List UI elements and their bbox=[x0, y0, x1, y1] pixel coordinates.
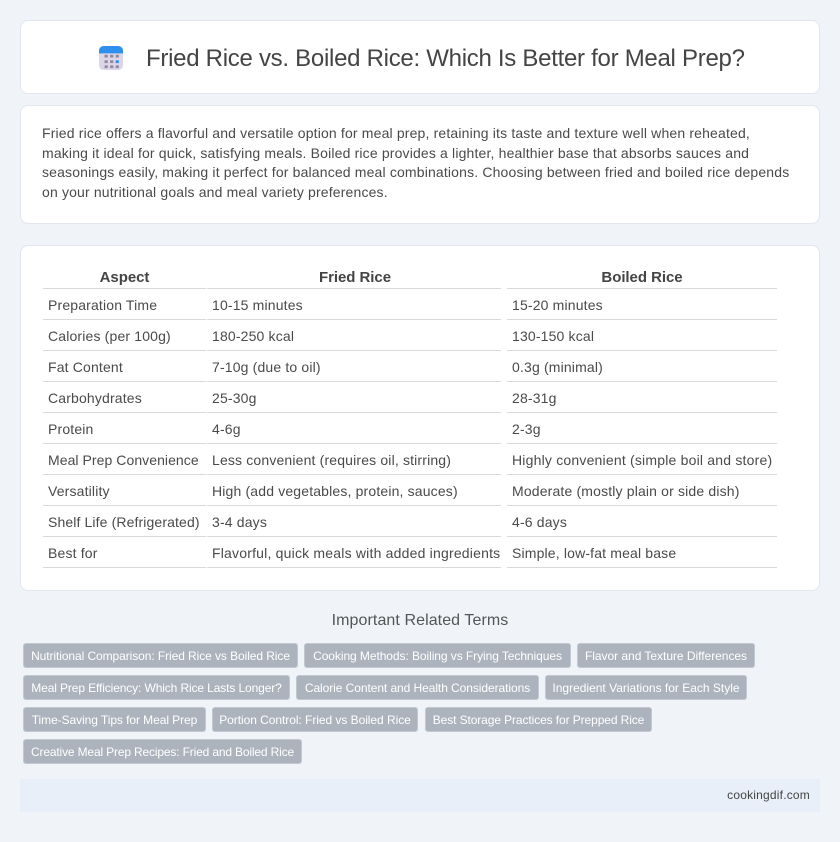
header card bbox=[20, 20, 820, 94]
related term tags: Calorie Content and Health Considerations bbox=[305, 681, 530, 695]
table rows: Highly convenient (simple boil and store) bbox=[512, 452, 772, 468]
table rows: Protein bbox=[48, 421, 93, 437]
table rows: Moderate (mostly plain or side dish) bbox=[512, 483, 740, 499]
intro text panel bbox=[20, 105, 820, 224]
table rows bbox=[43, 288, 777, 568]
table rows: 4-6g bbox=[212, 421, 241, 437]
table rows: Versatility bbox=[48, 483, 110, 499]
table rows: Calories (per 100g) bbox=[48, 328, 171, 344]
table rows: 4-6 days bbox=[512, 514, 567, 530]
related term tags: Cooking Methods: Boiling vs Frying Techniques bbox=[313, 649, 562, 663]
intro paragraph: seasonings easily, making it perfect for balanced meal combinations. Choosing between fried and boiled rice depends bbox=[42, 164, 789, 180]
table headers bbox=[100, 269, 683, 286]
table rows: 3-4 days bbox=[212, 514, 267, 530]
related term tags: Ingredient Variations for Each Style bbox=[552, 681, 740, 695]
related term tags: Best Storage Practices for Prepped Rice bbox=[433, 713, 644, 727]
related term tags bbox=[23, 643, 755, 764]
table rows: Best for bbox=[48, 545, 98, 561]
icon: calendar bbox=[99, 46, 123, 70]
table headers: Aspect bbox=[100, 269, 149, 286]
related term tags: Meal Prep Efficiency: Which Rice Lasts Longer? bbox=[31, 681, 282, 695]
table rows: 10-15 minutes bbox=[212, 297, 303, 313]
footer source text: cookingdif.com bbox=[727, 788, 810, 802]
intro paragraph: making it ideal for quick, satisfying meals. Boiled rice provides a lighter, healthier base that absorbs sauces and bbox=[42, 144, 749, 160]
related term tags: Flavor and Texture Differences bbox=[585, 649, 747, 663]
table rows: 0.3g (minimal) bbox=[512, 359, 603, 375]
table rows: Shelf Life (Refrigerated) bbox=[48, 514, 200, 530]
table rows: 130-150 kcal bbox=[512, 328, 594, 344]
table rows: 2-3g bbox=[512, 421, 541, 437]
related terms heading: Important Related Terms bbox=[332, 612, 508, 629]
title: Fried Rice vs. Boiled Rice: Which Is Better for Meal Prep? bbox=[146, 45, 745, 72]
related term tags: Portion Control: Fried vs Boiled Rice bbox=[219, 713, 411, 727]
intro paragraph: Fried rice offers a flavorful and versatile option for meal prep, retaining its taste and texture well when reheated, bbox=[42, 125, 750, 141]
related term tags: Nutritional Comparison: Fried Rice vs Boiled Rice bbox=[31, 649, 290, 663]
table headers: Boiled Rice bbox=[601, 269, 683, 286]
table rows: Fat Content bbox=[48, 359, 123, 375]
table rows: High (add vegetables, protein, sauces) bbox=[212, 483, 458, 499]
comparison table panel bbox=[20, 245, 820, 591]
table headers: Fried Rice bbox=[319, 269, 391, 286]
intro paragraph bbox=[42, 125, 789, 200]
table rows: Less convenient (requires oil, stirring) bbox=[212, 452, 451, 468]
table rows: 180-250 kcal bbox=[212, 328, 294, 344]
table rows: Preparation Time bbox=[48, 297, 157, 313]
table rows: 28-31g bbox=[512, 390, 557, 406]
intro paragraph: on your nutritional goals and meal variety preferences. bbox=[42, 184, 388, 200]
table rows: Carbohydrates bbox=[48, 390, 142, 406]
table rows: 7-10g (due to oil) bbox=[212, 359, 321, 375]
footer bar bbox=[20, 779, 820, 812]
table rows: Flavorful, quick meals with added ingredients bbox=[212, 545, 500, 561]
table rows: Simple, low-fat meal base bbox=[512, 545, 676, 561]
table rows: 25-30g bbox=[212, 390, 257, 406]
related term tags: Creative Meal Prep Recipes: Fried and Boiled Rice bbox=[31, 745, 294, 759]
related term tags: Time-Saving Tips for Meal Prep bbox=[32, 713, 197, 727]
table rows: 15-20 minutes bbox=[512, 297, 603, 313]
table rows: Meal Prep Convenience bbox=[48, 452, 199, 468]
